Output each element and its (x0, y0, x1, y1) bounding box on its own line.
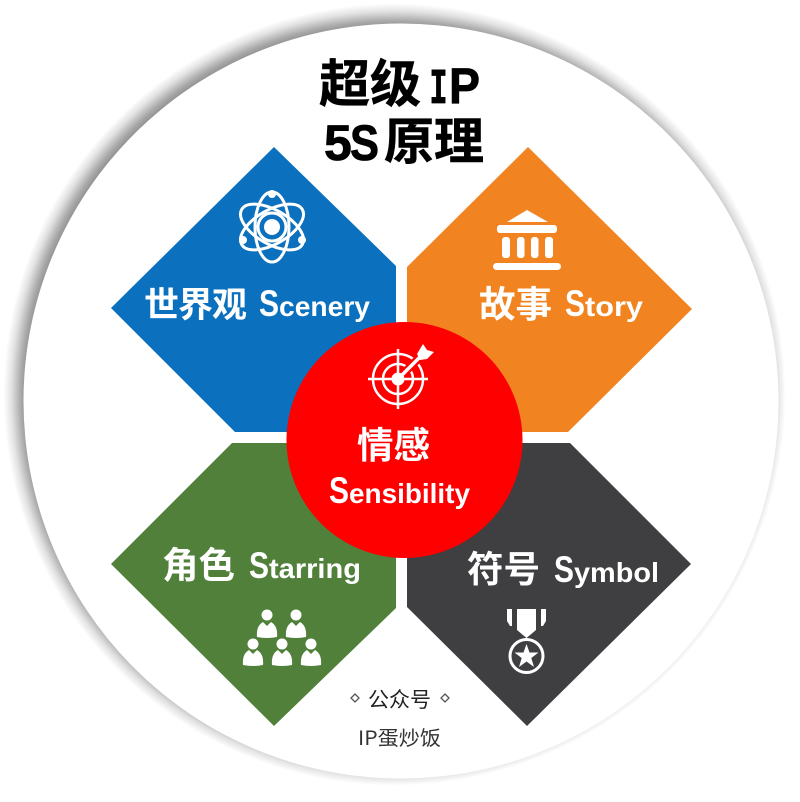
label: 角色 Starring (162, 536, 361, 589)
panel: Scenery (blue) (111, 147, 396, 432)
label: 情感 Sensibility: 情感 (357, 416, 430, 469)
label: 故事 Story (479, 275, 643, 328)
label: 符号 Symbol (467, 540, 659, 593)
title: S (350, 115, 379, 171)
label: 世界观 Scenery: cenery (279, 291, 370, 322)
title: 原理 (384, 102, 484, 174)
label: 符号 Symbol: S (554, 549, 574, 590)
label: 角色 Starring: 角色 (162, 536, 235, 589)
panel: Starring (green) (111, 443, 396, 726)
icon: group of people (243, 610, 321, 666)
title: 超级 (319, 43, 421, 117)
title: P (449, 58, 480, 114)
label: 角色 Starring: tarring (269, 553, 361, 584)
footer: 公众号 IP蛋炒饭: IP蛋炒饭 (358, 722, 441, 751)
panel: Story (orange) (407, 147, 692, 432)
panel: Symbol (dark grey) (407, 443, 691, 726)
title (319, 43, 484, 174)
icon: target with arrow (368, 344, 434, 409)
label: 故事 Story: tory (585, 291, 643, 322)
title: I (430, 62, 448, 119)
footer: 公众号 IP蛋炒饭: 公众号 (368, 684, 431, 714)
panel: Sensibility (red centre circle) (286, 322, 522, 558)
label: 情感 Sensibility: ensibility (349, 478, 470, 509)
icon: bank building (493, 210, 561, 270)
label: 世界观 Scenery: S (259, 283, 279, 324)
label: 故事 Story: 故事 (479, 275, 552, 328)
label: 世界观 Scenery (144, 277, 370, 328)
icon: medal (507, 609, 546, 672)
footer: 公众号 IP蛋炒饭 (351, 684, 449, 751)
label: 情感 Sensibility: S (329, 470, 349, 511)
label: 符号 Symbol: ymbol (574, 557, 659, 588)
label: 情感 Sensibility (329, 416, 470, 511)
label: 世界观 Scenery: 世界观 (144, 277, 247, 328)
title: 5 (324, 115, 352, 171)
label: 符号 Symbol: 符号 (467, 540, 540, 593)
label: 角色 Starring: S (249, 545, 269, 586)
icon: atom (233, 190, 311, 262)
label: 故事 Story: S (565, 283, 585, 324)
